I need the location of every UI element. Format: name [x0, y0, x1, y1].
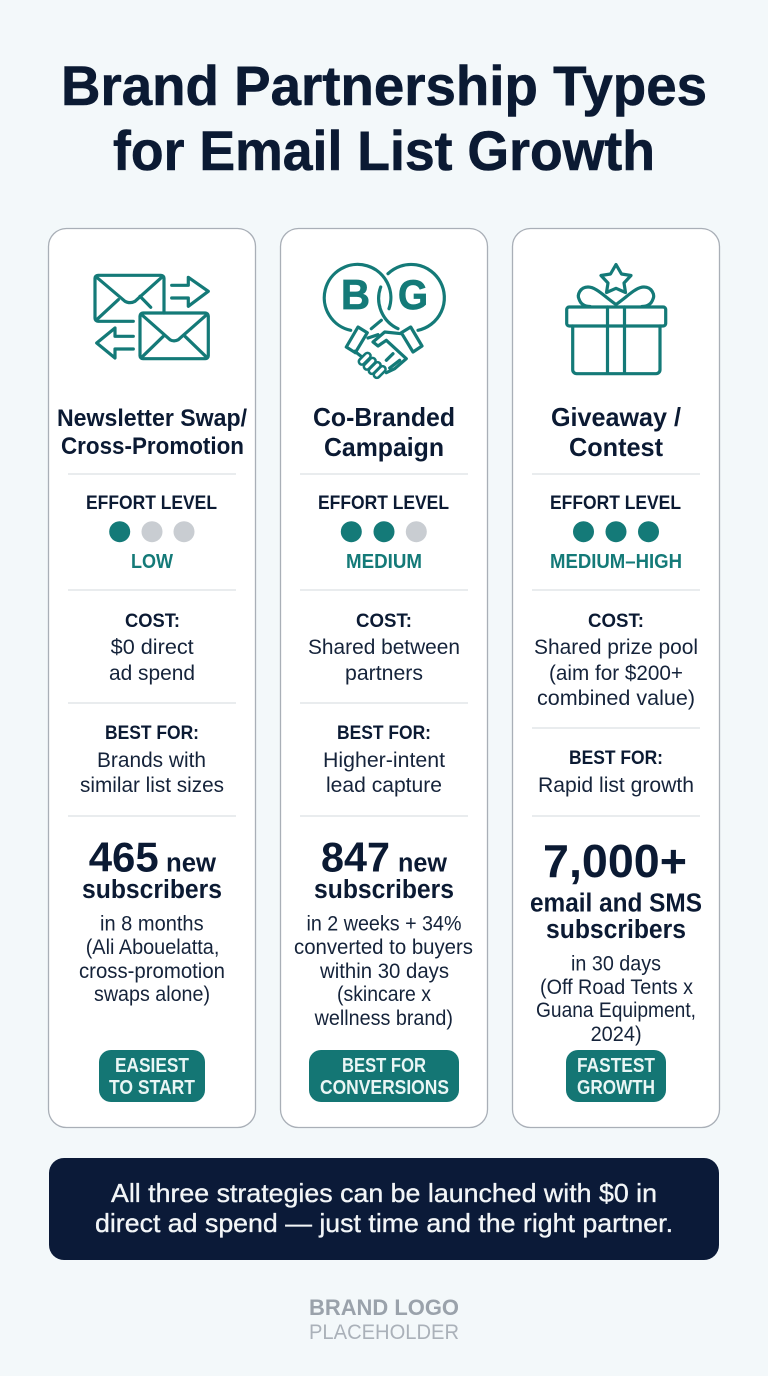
effort level: medium-high: MEDIUM–HIGH: [550, 551, 682, 573]
cost: co-branded campaign: COST:: [356, 610, 412, 632]
best for: newsletter swap: Brands with: [97, 749, 206, 772]
stat: 7,000+ subscribers: in 30 days: [571, 952, 661, 976]
best for: newsletter swap: similar list sizes: [80, 774, 224, 797]
stat: 847 new subscribers: new: [398, 850, 447, 878]
stat: 847 new subscribers: 847: [321, 834, 390, 880]
stat: 847 new subscribers: converted to buyers: [294, 936, 473, 959]
heading: giveaway contest: Giveaway /: [551, 402, 681, 432]
cost: co-branded campaign: Shared between: [308, 636, 460, 659]
best for: giveaway contest: BEST FOR:: [569, 747, 663, 769]
stat: 465 new subscribers: swaps alone): [94, 983, 210, 1006]
effort level: medium: [318, 492, 449, 573]
stat: 7,000+ subscribers: email and SMS: [530, 890, 702, 918]
cost: newsletter swap: $0 direct: [111, 636, 194, 659]
cost: newsletter swap: [109, 610, 195, 685]
heading: newsletter swap: Cross-Promotion: [61, 433, 244, 460]
cost: newsletter swap: COST:: [125, 610, 180, 632]
effort level: medium: MEDIUM: [346, 551, 422, 573]
best for: co-branded campaign: Higher-intent: [323, 749, 445, 772]
heading: giveaway contest: Contest: [569, 432, 663, 462]
stat: 465 new subscribers: (Ali Abouelatta,: [86, 936, 219, 959]
badge: best for conversions: BEST FOR: [342, 1055, 426, 1077]
best for: newsletter swap: BEST FOR:: [105, 722, 199, 744]
effort level: low: LOW: [131, 551, 173, 573]
heading: newsletter swap: [57, 405, 247, 460]
cost: giveaway contest: Shared prize pool: [534, 636, 698, 659]
badge: easiest to start: EASIEST: [115, 1055, 189, 1077]
callout banner: direct ad spend — just time and the right partner.: [95, 1208, 673, 1238]
heading: newsletter swap: Newsletter Swap/: [57, 405, 247, 432]
best for: co-branded campaign: lead capture: [326, 774, 442, 797]
stat: 465 new subscribers: cross-promotion: [79, 960, 225, 983]
title: Brand Partnership Types: [61, 54, 707, 117]
cost: giveaway contest: combined value): [537, 687, 695, 710]
stat: 7,000+ subscribers: (Off Road Tents x: [540, 976, 693, 999]
panel: newsletter swap: [48, 228, 256, 1128]
panel: giveaway contest: [512, 228, 720, 1128]
stat: 465 new subscribers: 465: [89, 834, 159, 880]
heading: co-branded campaign: [313, 402, 455, 462]
title: for Email List Growth: [113, 119, 655, 182]
heading: co-branded campaign: Co-Branded: [313, 402, 455, 432]
best for: giveaway contest: Rapid list growth: [538, 774, 694, 797]
stat: 847 new subscribers: in 2 weeks + 34%: [306, 912, 462, 936]
stat: 847 new subscribers: within 30 days: [319, 960, 449, 983]
cost: giveaway contest: [534, 610, 698, 710]
stat: 847 new subscribers: subscribers: [314, 876, 454, 904]
stat: 847 new subscribers: [294, 834, 473, 1030]
cost: co-branded campaign: partners: [345, 662, 423, 685]
heading: co-branded campaign: Campaign: [324, 432, 444, 462]
stat: 465 new subscribers: new: [166, 850, 216, 878]
heading: giveaway contest: [551, 402, 681, 462]
best for: giveaway contest: [538, 747, 694, 797]
brand logo placeholder: PLACEHOLDER: [309, 1321, 459, 1344]
best for: co-branded campaign: [323, 722, 445, 797]
badge: fastest growth: [566, 1050, 666, 1102]
icon: brand circles and handshake: B: [341, 271, 370, 318]
stat: 847 new subscribers: wellness brand): [314, 1007, 453, 1030]
best for: newsletter swap: [80, 722, 224, 797]
stat: 465 new subscribers: in 8 months: [100, 912, 204, 936]
stat: 847 new subscribers: (skincare x: [337, 983, 431, 1006]
badge: fastest growth: GROWTH: [577, 1077, 655, 1099]
effort level: medium-high: [550, 492, 682, 573]
effort level: low: [86, 492, 217, 573]
cost: giveaway contest: (aim for $200+: [549, 662, 683, 685]
badge: easiest to start: TO START: [109, 1077, 195, 1099]
cost: co-branded campaign: [308, 610, 460, 685]
brand logo placeholder: BRAND LOGO: [309, 1295, 459, 1320]
stat: 7,000+ subscribers: Guana Equipment,: [536, 999, 696, 1022]
stat: 7,000+ subscribers: 2024): [591, 1023, 642, 1046]
icon: brand circles and handshake: [324, 264, 444, 379]
brand logo placeholder: [309, 1295, 459, 1344]
effort level: medium: EFFORT LEVEL: [318, 492, 449, 514]
callout banner: [49, 1158, 719, 1260]
badge: best for conversions: CONVERSIONS: [320, 1077, 449, 1099]
title: [61, 54, 707, 182]
badge: fastest growth: FASTEST: [577, 1055, 655, 1077]
stat: 7,000+ subscribers: [530, 835, 702, 1046]
stat: 465 new subscribers: [79, 834, 225, 1006]
effort level: low: EFFORT LEVEL: [86, 492, 217, 514]
icon: brand circles and handshake: G: [398, 271, 428, 318]
cost: giveaway contest: COST:: [588, 610, 644, 632]
callout banner: All three strategies can be launched with $0 in: [111, 1178, 657, 1208]
icon: swapping envelopes: [95, 275, 208, 359]
stat: 7,000+ subscribers: subscribers: [546, 916, 686, 944]
badge: best for conversions: [309, 1050, 459, 1102]
panel: co-branded campaign: [280, 228, 488, 1128]
cost: newsletter swap: ad spend: [109, 662, 195, 685]
stat: 465 new subscribers: subscribers: [82, 876, 222, 904]
best for: co-branded campaign: BEST FOR:: [337, 722, 431, 744]
badge: easiest to start: [99, 1050, 205, 1102]
icon: gift box with star: [567, 264, 666, 374]
stat: 7,000+ subscribers: 7,000+: [543, 835, 687, 887]
effort level: medium-high: EFFORT LEVEL: [550, 492, 681, 514]
